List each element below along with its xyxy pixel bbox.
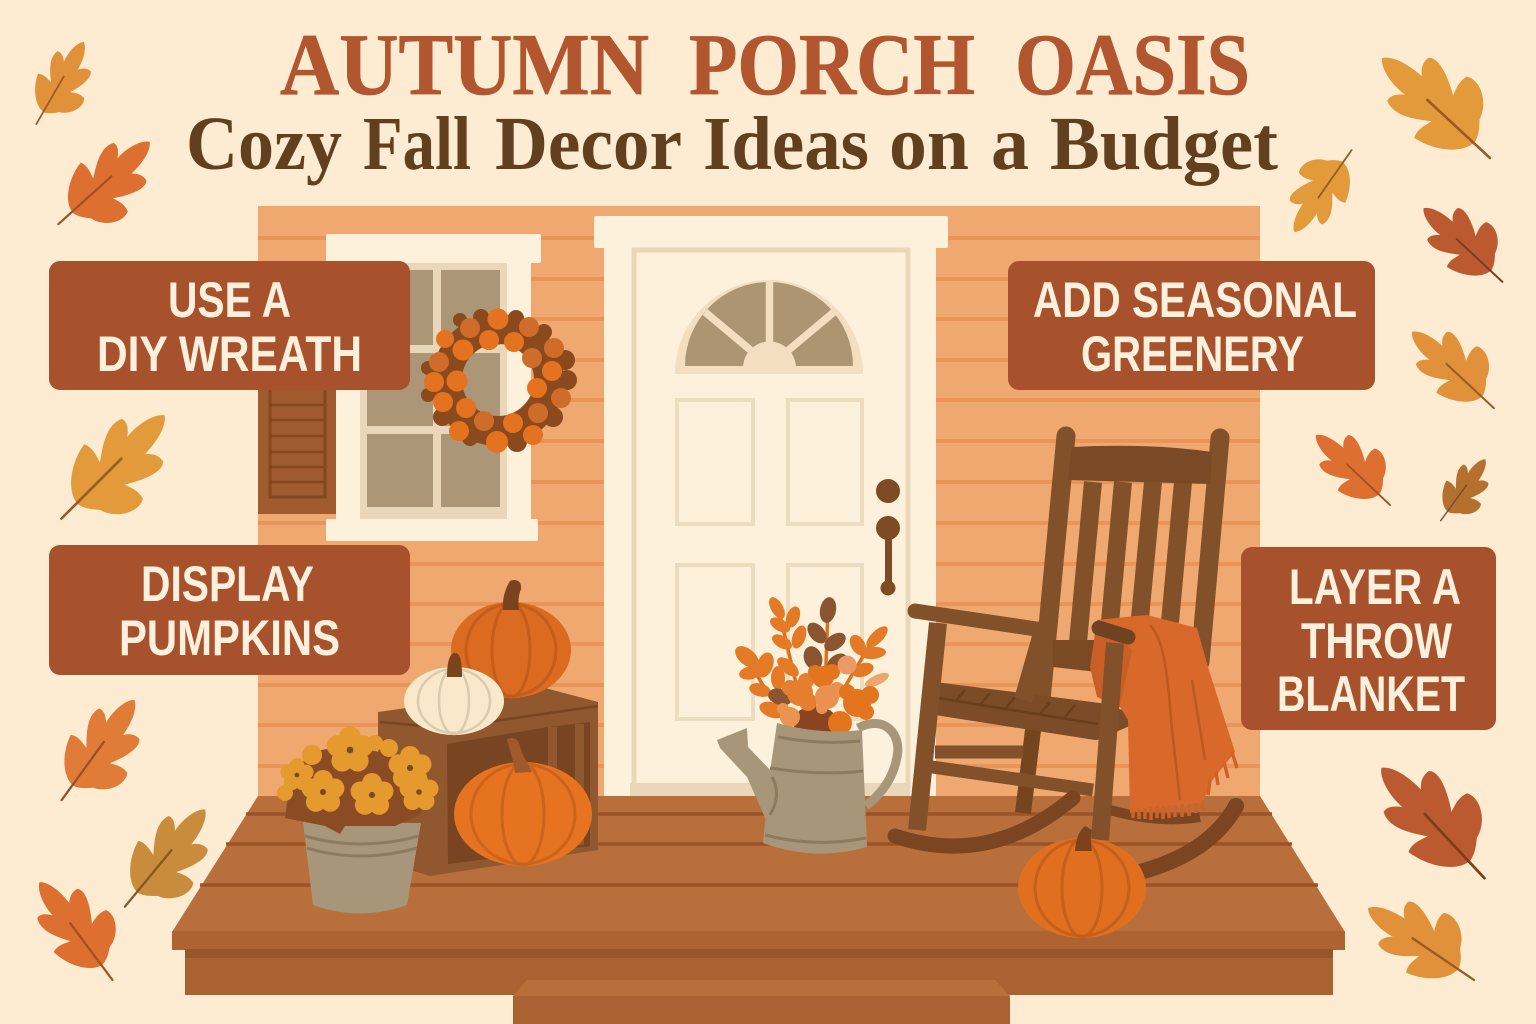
step <box>513 980 1010 1024</box>
house wall with siding <box>258 206 1260 800</box>
label: use a DIY wreath: DIY WREATH <box>97 326 362 382</box>
label: layer a throw blanket <box>1241 547 1496 730</box>
stretchers <box>932 752 1093 790</box>
lower back rail <box>1053 640 1097 672</box>
label: add seasonal greenery: ADD SEASONAL <box>1033 272 1357 328</box>
label: layer a throw blanket: LAYER A <box>1289 559 1461 615</box>
top rail <box>1068 446 1212 484</box>
label: use a DIY wreath <box>49 261 410 390</box>
door panels <box>677 400 862 719</box>
flower bucket <box>277 726 438 914</box>
label: display pumpkins: DISPLAY <box>141 556 314 612</box>
label: layer a throw blanket: BLANKET <box>1277 666 1465 722</box>
subtitle <box>186 102 1278 186</box>
subtitle: on <box>889 102 969 186</box>
back posts <box>1041 436 1066 700</box>
can spout <box>717 728 772 820</box>
subtitle: Ideas <box>703 102 869 186</box>
bouquet <box>731 595 891 738</box>
blanket <box>1090 615 1237 820</box>
subtitle: Cozy <box>186 102 342 186</box>
label: display pumpkins: PUMPKINS <box>119 610 340 666</box>
subtitle: Budget <box>1050 102 1278 186</box>
pumpkin: white <box>404 653 504 735</box>
back slats <box>1078 482 1183 642</box>
label: layer a throw blanket: THROW <box>1301 613 1453 669</box>
wreath <box>421 308 577 453</box>
pumpkin: in crate <box>454 738 592 866</box>
pumpkin: porch floor <box>1018 826 1146 938</box>
subtitle: Decor <box>495 102 682 186</box>
crate <box>378 688 598 876</box>
title: OASIS <box>1015 17 1250 114</box>
falling leaves: left side <box>15 30 236 998</box>
label: use a DIY wreath: USE A <box>168 272 291 328</box>
rear rocker <box>1110 810 1200 819</box>
mum flowers <box>277 726 438 815</box>
door handle <box>876 479 900 596</box>
rear leg <box>1023 730 1033 813</box>
falling leaves: right side <box>1269 24 1526 1006</box>
can body <box>763 723 867 854</box>
left rocker <box>895 798 1073 846</box>
door <box>594 216 948 797</box>
label: add seasonal greenery <box>1008 261 1375 390</box>
subtitle: a <box>991 102 1029 186</box>
label: add seasonal greenery: GREENERY <box>1081 326 1304 382</box>
window <box>326 234 541 541</box>
seat <box>935 682 1132 740</box>
pumpkin: top of crate <box>451 580 571 698</box>
title: PORCH <box>689 17 975 114</box>
shutter <box>258 385 336 514</box>
title: AUTUMN <box>280 17 649 114</box>
title <box>280 17 1250 114</box>
rocking chair <box>895 436 1237 872</box>
bucket <box>303 822 421 914</box>
door arch window <box>675 280 863 374</box>
can handle <box>858 723 898 806</box>
foliage <box>285 745 425 834</box>
watering can with bouquet <box>717 595 898 854</box>
front rocker <box>1140 806 1236 872</box>
left arm and posts <box>917 623 938 830</box>
deck <box>172 796 1345 995</box>
subtitle: Fall <box>363 102 471 186</box>
label: display pumpkins <box>49 545 410 675</box>
right arm and post <box>1100 643 1115 840</box>
